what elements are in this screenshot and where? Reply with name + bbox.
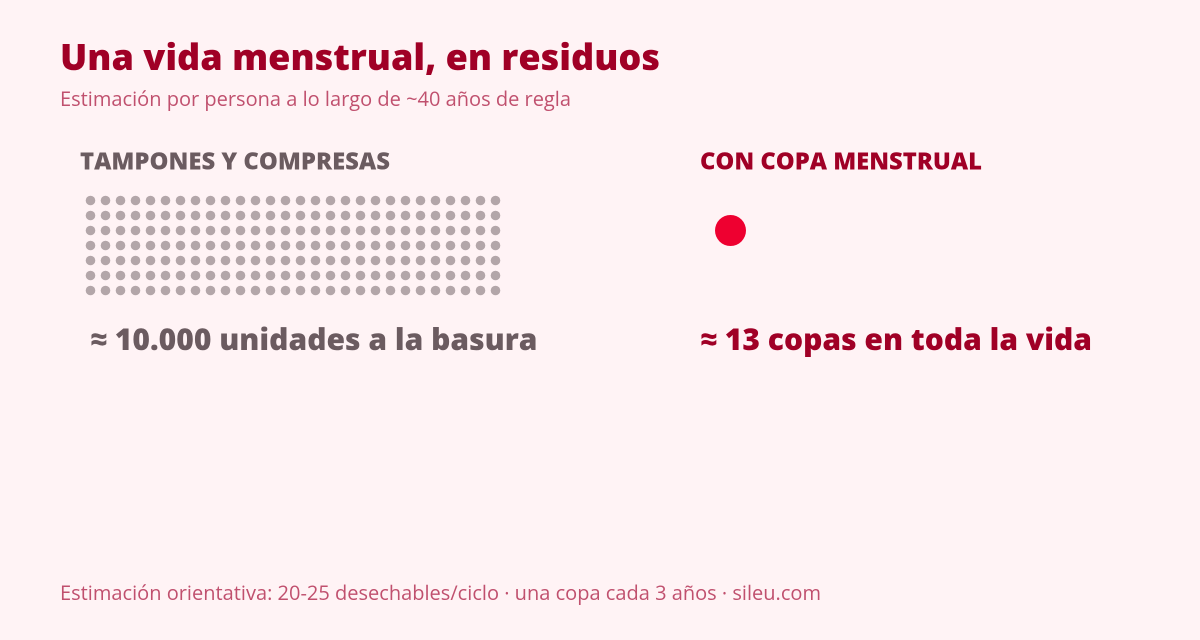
- label: disposables total: ≈ 10.000 unidades a la basura: [90, 318, 538, 359]
- subtitle: Estimación por persona a lo largo de ~40 años de regla: [60, 85, 571, 112]
- icon: single cup dot: [715, 215, 746, 246]
- panel: menstrual cup: [700, 144, 1092, 359]
- label: cup total: ≈ 13 copas en toda la vida: [700, 318, 1092, 359]
- title: Una vida menstrual, en residuos: [60, 32, 660, 81]
- heading: disposables: TAMPONES Y COMPRESAS: [80, 144, 390, 178]
- heading: cup: CON COPA MENSTRUAL: [700, 144, 982, 178]
- dot grid: disposable units: [86, 196, 500, 295]
- panel: disposables: [80, 144, 538, 359]
- footer note: Estimación orientativa: 20-25 desechables/ciclo · una copa cada 3 años · sileu.com: [60, 579, 821, 606]
